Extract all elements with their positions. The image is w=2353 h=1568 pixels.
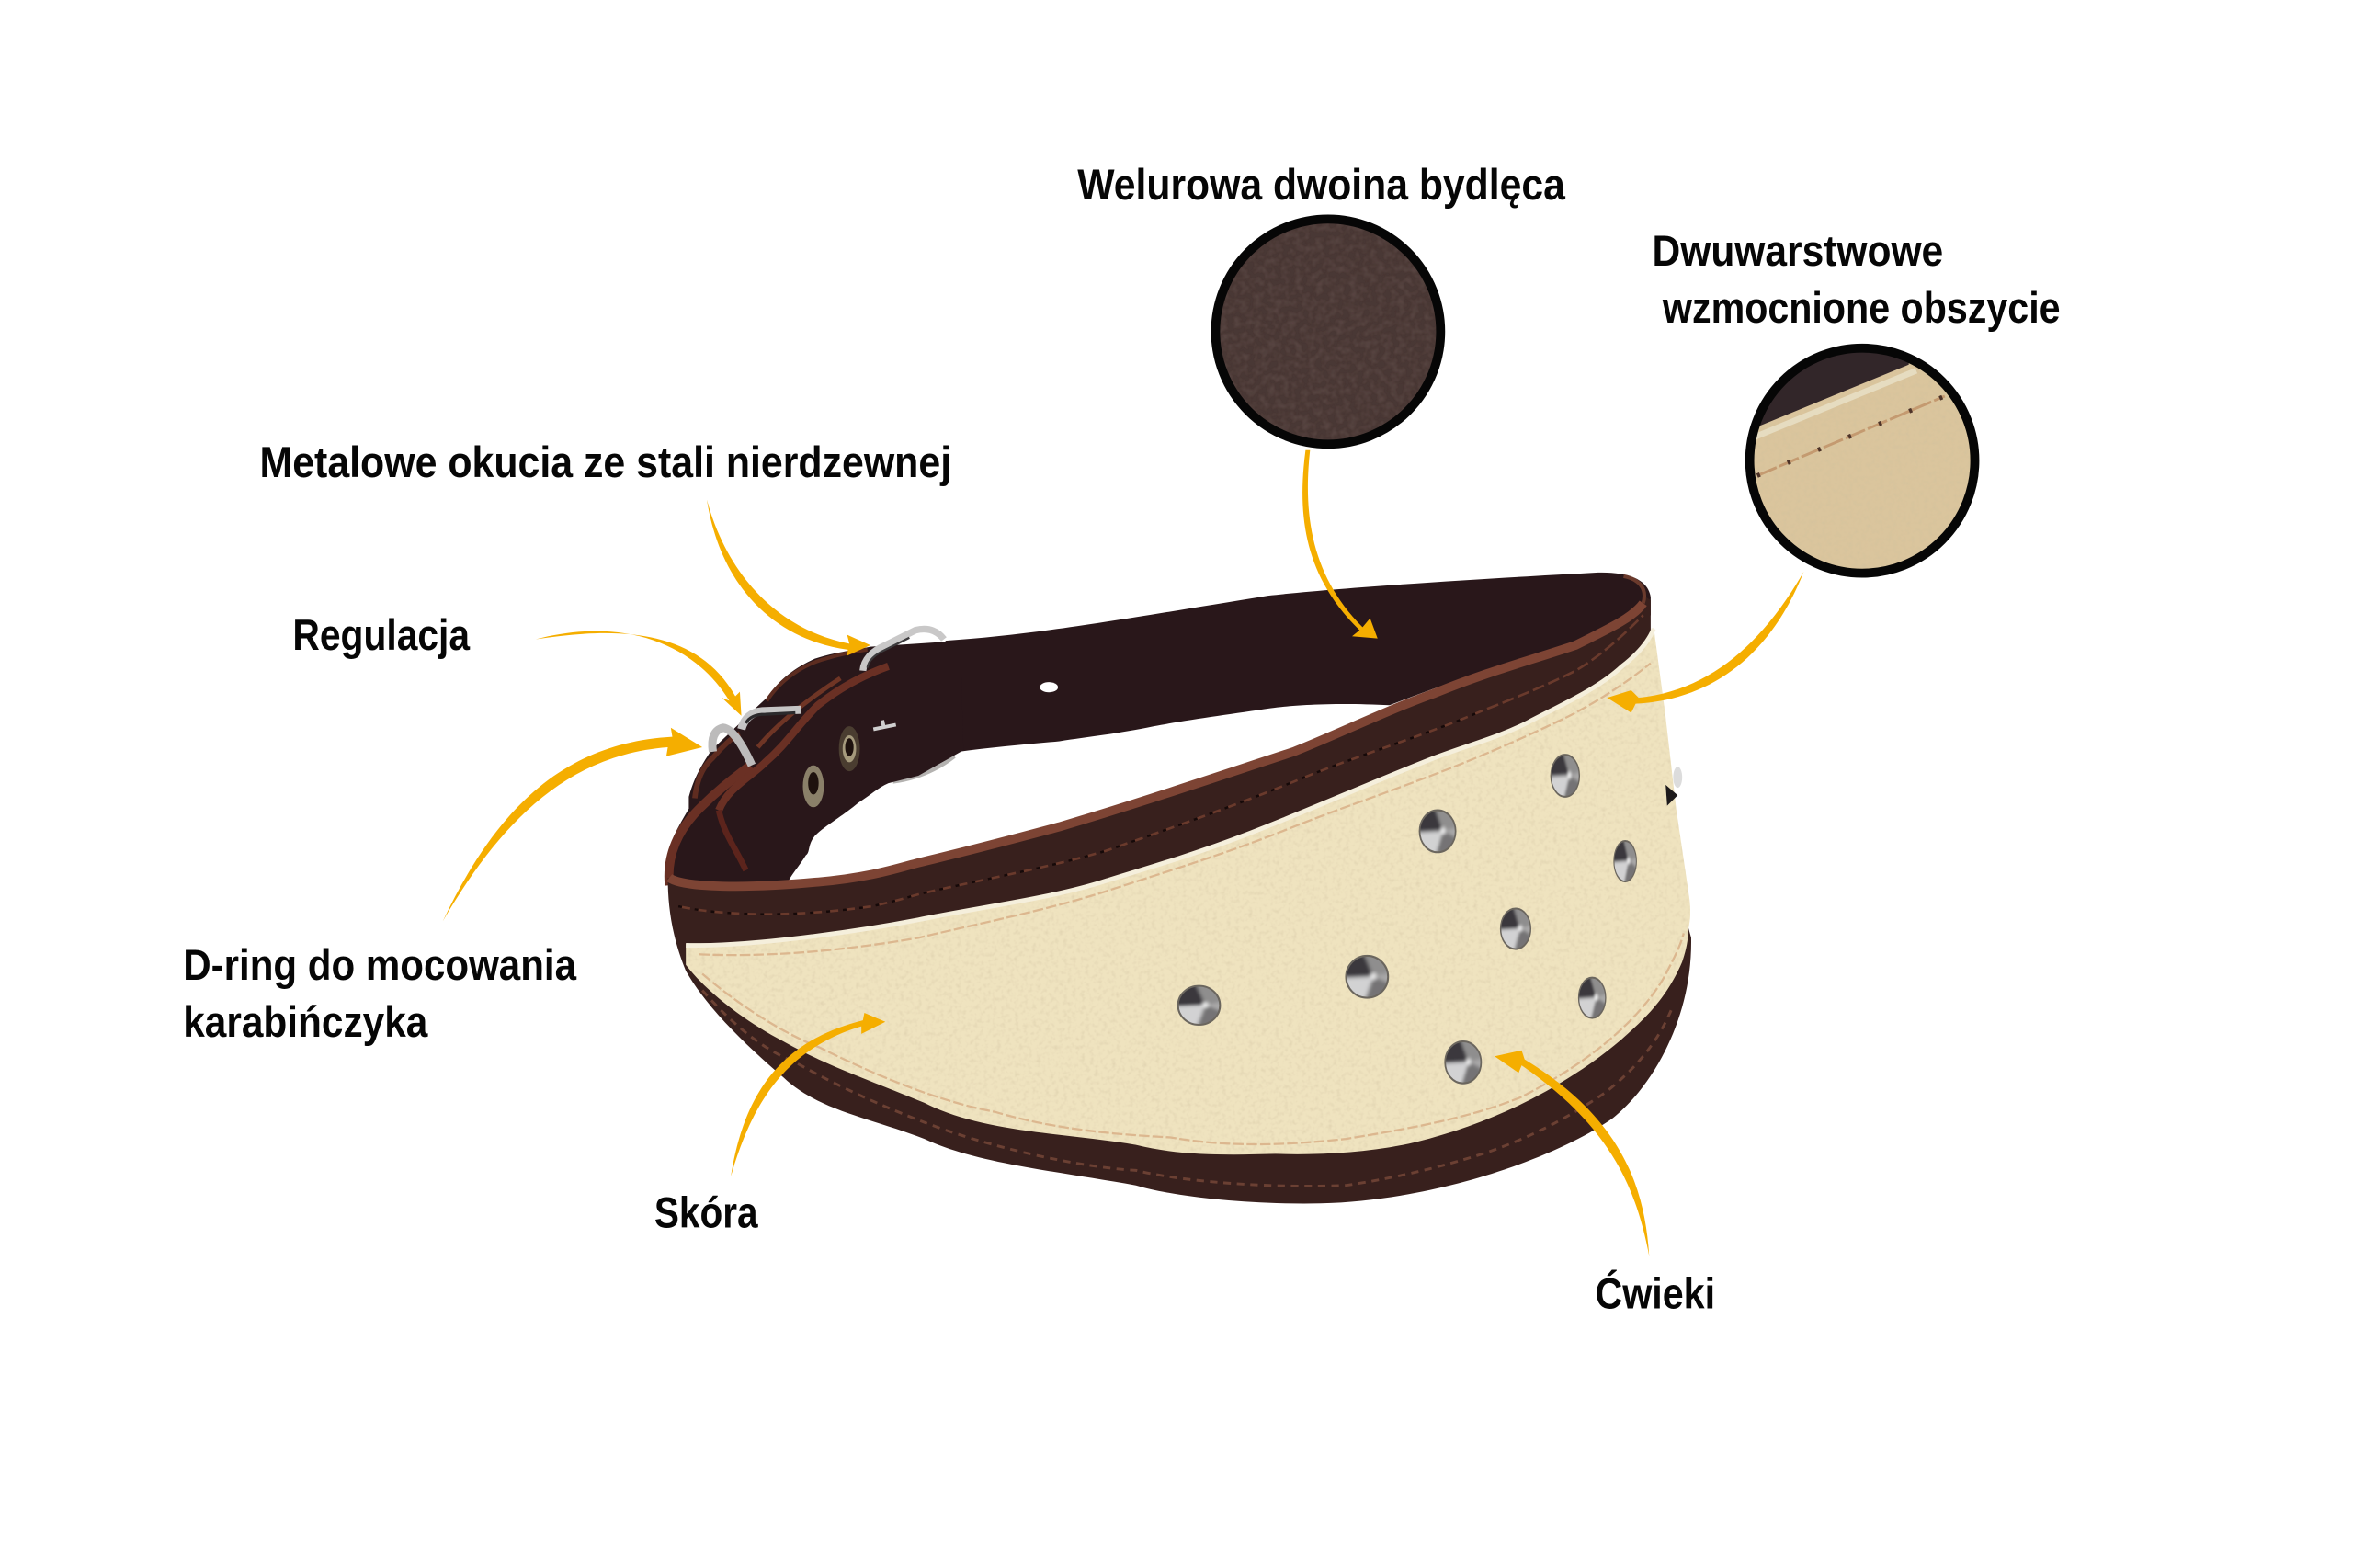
cream panel stitching: [699, 664, 1684, 1144]
buckle: [863, 629, 944, 671]
label: D-ring: [183, 941, 577, 1047]
arrow: leather: [731, 1013, 885, 1176]
looped strap end: [666, 641, 963, 901]
label: metal fittings: Metalowe okucia ze stali nierdzewnej: [260, 438, 951, 487]
detail circle: suede: [1215, 219, 1440, 444]
band stitching: [678, 615, 1643, 915]
label: reinforced stitching: wzmocnione obszycie: [1662, 284, 2061, 333]
arrow: metal fittings: [707, 500, 870, 655]
label: reinforced stitching: [1653, 227, 2061, 333]
label: velour split leather: Welurowa dwoina bydlęca: [1077, 161, 1565, 210]
detail circle: stitching: [1745, 344, 1980, 577]
studs: [1174, 753, 1638, 1085]
D-ring: [712, 728, 752, 766]
label: D-ring: karabińczyka: [183, 998, 428, 1047]
back strap: [946, 573, 1651, 752]
arrow: stitching: [1608, 572, 1803, 712]
label: D-ring: D-ring do mocowania: [183, 941, 577, 990]
label: adjustment: Regulacja: [292, 611, 471, 660]
metal keeper: [742, 710, 801, 729]
label: leather: Skóra: [654, 1188, 758, 1237]
arrow: studs: [1495, 1051, 1649, 1256]
label: studs: Ćwieki: [1595, 1268, 1715, 1319]
eyelets: [802, 726, 860, 807]
infographic canvas: [186, 167, 2059, 1309]
strap hole: [1040, 682, 1058, 692]
front band: [668, 597, 1691, 1203]
cream fuzzy edge: [686, 629, 1654, 946]
lower band stitching: [702, 990, 1673, 1187]
collar: [666, 573, 1691, 1203]
strap edge rim: [669, 650, 889, 885]
band rim: [669, 576, 1644, 886]
arrow: adjustment: [536, 631, 742, 716]
arrow: velour: [1302, 450, 1378, 639]
cream leather panel: [686, 627, 1690, 1154]
label: reinforced stitching: Dwuwarstwowe: [1653, 227, 1943, 276]
buckle tongue: [873, 721, 896, 729]
rear metal buckle: [892, 756, 954, 782]
back stud: [1665, 767, 1682, 806]
arrow: D-ring: [443, 728, 702, 921]
